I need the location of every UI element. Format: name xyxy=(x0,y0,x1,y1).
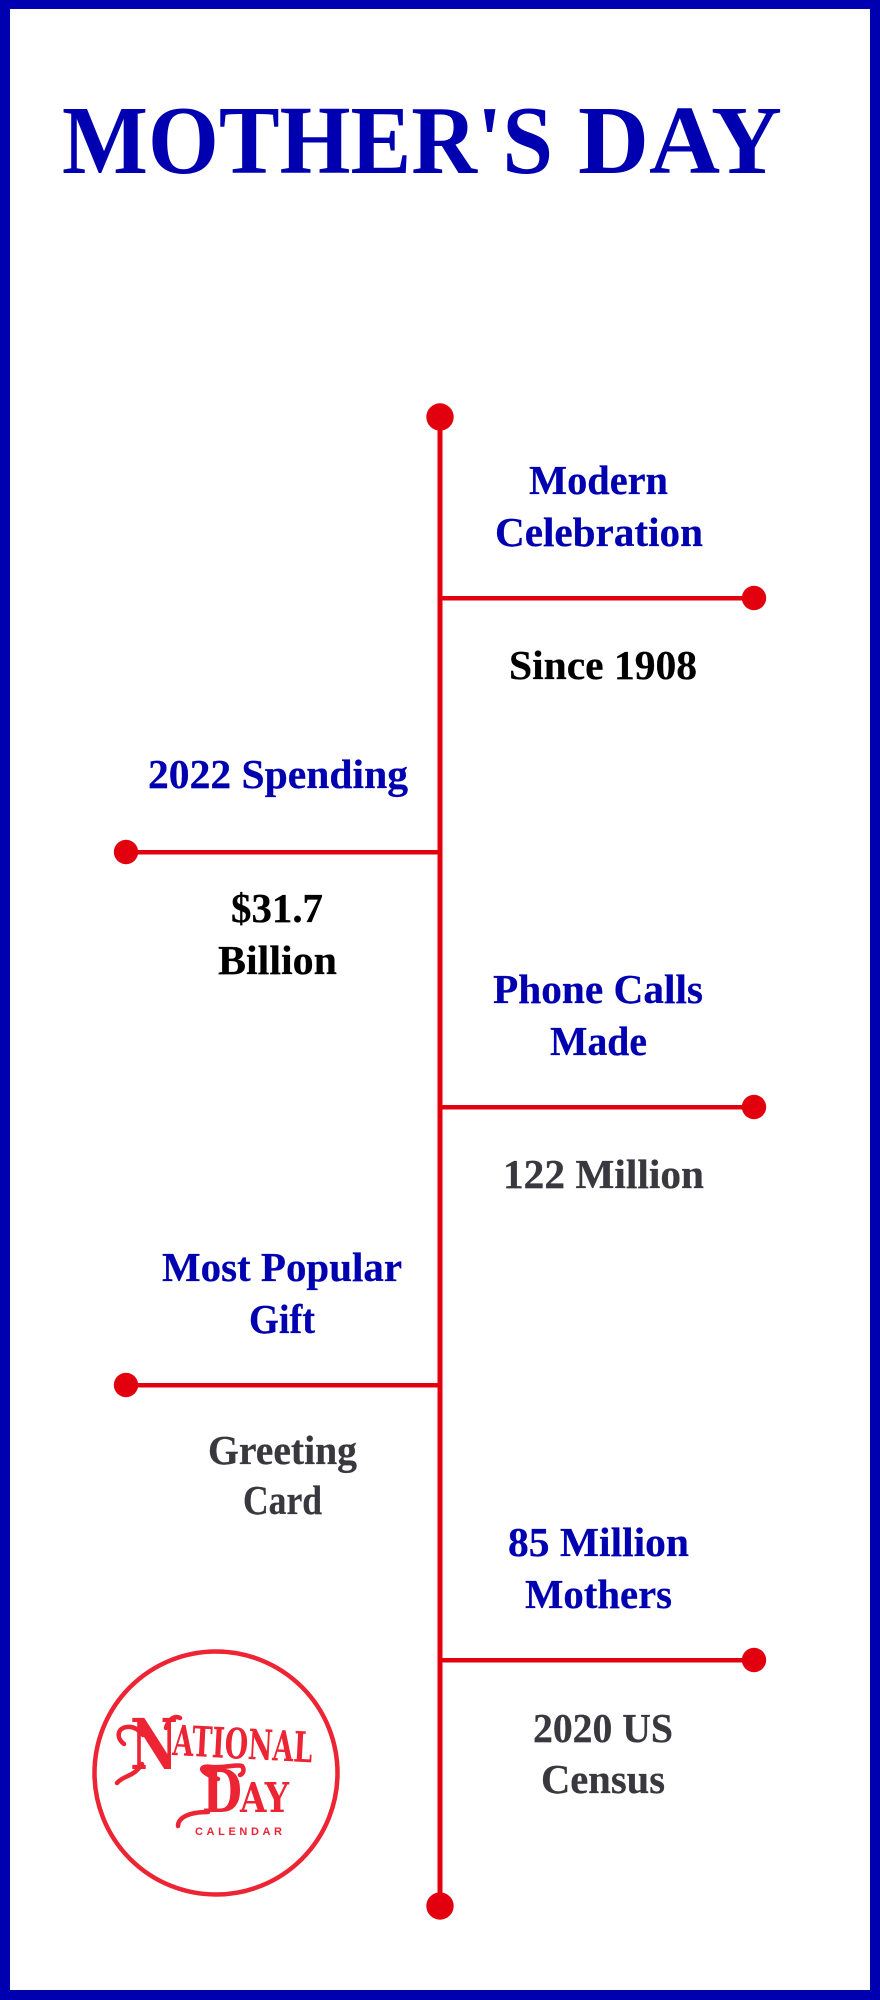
value: 31.7 billion xyxy=(218,885,337,983)
value: greeting card xyxy=(208,1427,357,1523)
logo: national day calendar: N xyxy=(130,1703,178,1786)
heading: most popular gift xyxy=(162,1244,402,1342)
heading: modern celebration xyxy=(495,457,703,555)
value: greeting card: Card xyxy=(243,1477,322,1523)
title: MOTHER'S xyxy=(62,87,553,194)
heading: 85 million mothers: Mothers xyxy=(525,1571,672,1617)
value: 2020 us census xyxy=(533,1705,673,1802)
heading: phone calls made: Made xyxy=(550,1018,647,1064)
branch connector xyxy=(440,586,766,610)
value: greeting card: Greeting xyxy=(208,1427,357,1473)
heading: modern celebration: Celebration xyxy=(495,509,703,555)
heading: most popular gift: Gift xyxy=(249,1296,315,1342)
logo: national day calendar: CALENDAR xyxy=(195,1826,282,1838)
heading: 85 million mothers xyxy=(508,1519,689,1617)
entry: most popular gift xyxy=(114,1244,440,1523)
value: 2020 us census: Census xyxy=(541,1756,665,1802)
entry: 85 million mothers xyxy=(440,1519,766,1802)
heading: modern celebration: Modern xyxy=(529,457,668,503)
logo: national day calendar: D xyxy=(202,1757,242,1827)
branch connector xyxy=(440,1095,766,1119)
timeline spine xyxy=(426,403,454,1920)
logo: national day calendar: AY xyxy=(239,1774,290,1822)
branch connector xyxy=(114,840,440,864)
value: 31.7 billion: $31.7 xyxy=(231,885,323,931)
entry: phone calls made xyxy=(440,966,766,1197)
logo: national day calendar: ATIONAL xyxy=(171,1716,314,1772)
value: 122 million: 122 Million xyxy=(503,1151,704,1197)
branch connector xyxy=(114,1373,440,1397)
entry: modern celebration xyxy=(440,457,766,688)
value: 2020 us census: 2020 US xyxy=(533,1705,673,1751)
heading: 2022 spending: 2022 Spending xyxy=(148,751,408,797)
logo: national day calendar xyxy=(94,1652,338,1894)
heading: 85 million mothers: 85 Million xyxy=(508,1519,689,1565)
value: since 1908: Since 1908 xyxy=(509,642,697,688)
branch connector xyxy=(440,1648,766,1672)
value: 31.7 billion: Billion xyxy=(218,937,337,983)
heading: most popular gift: Most Popular xyxy=(162,1244,402,1290)
title: DAY xyxy=(578,87,782,194)
heading: phone calls made xyxy=(493,966,703,1064)
entry: 2022 spending xyxy=(114,751,440,983)
heading: phone calls made: Phone Calls xyxy=(493,966,703,1012)
